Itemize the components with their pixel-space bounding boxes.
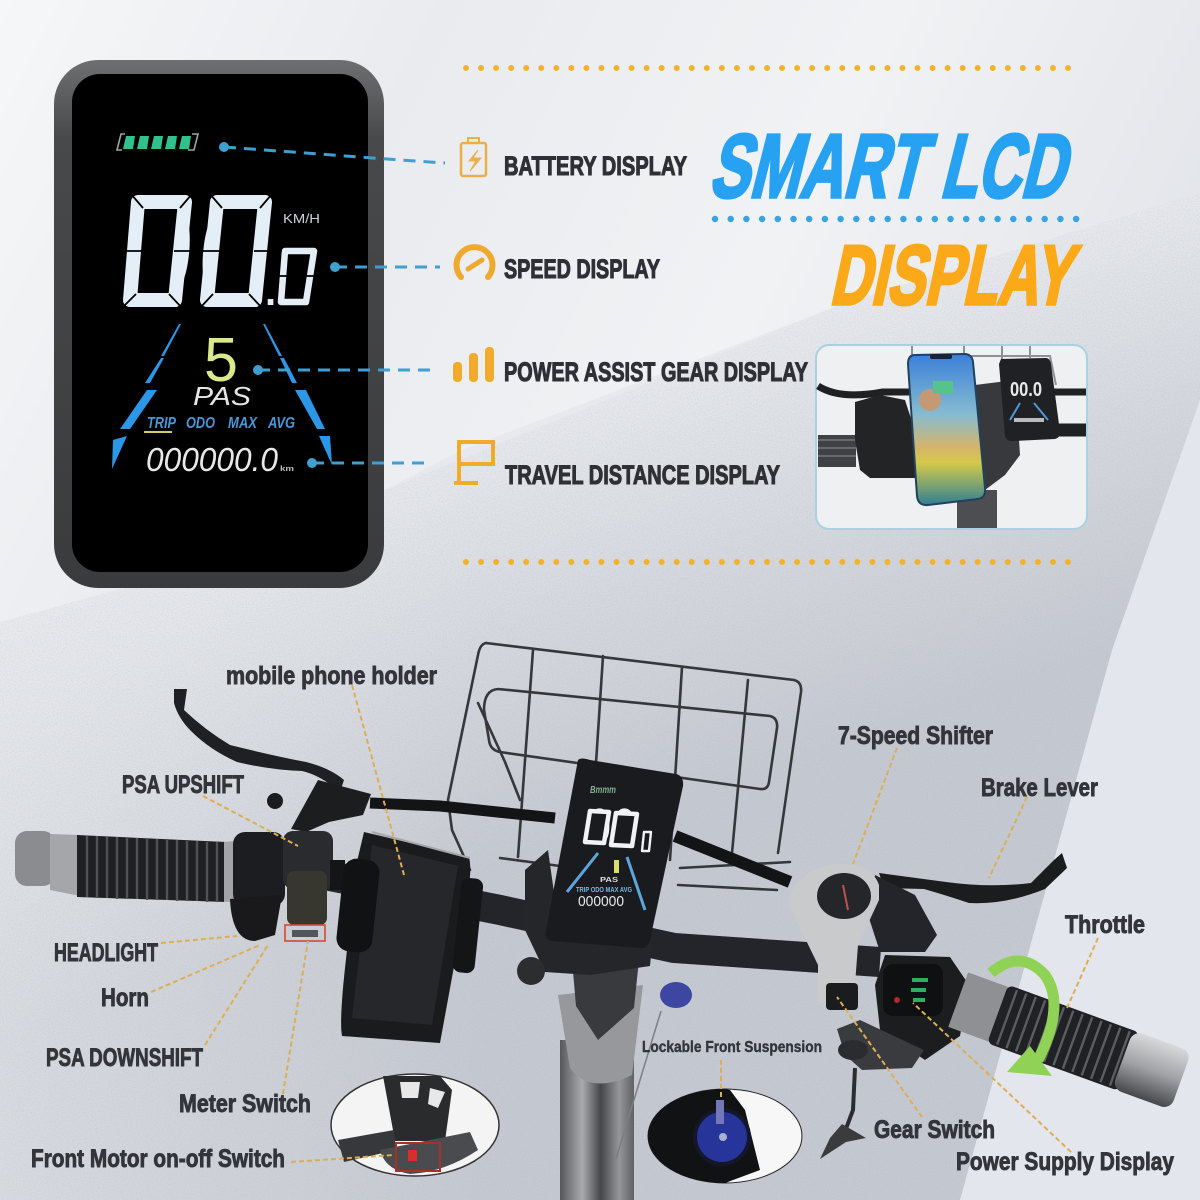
icon: battery xyxy=(461,138,486,176)
suspension lock knob xyxy=(660,982,692,1008)
mode labels: MAX xyxy=(228,415,258,432)
icon: speedometer xyxy=(456,247,492,277)
left brake lever xyxy=(174,689,344,792)
speed reading: 0 xyxy=(278,240,318,317)
label: travel distance display: TRAVEL DISTANCE DISPLAY xyxy=(505,460,780,490)
mode labels: ODO xyxy=(186,415,215,432)
speed road gauge bars xyxy=(112,324,332,469)
small LCD on handlebar: 00 xyxy=(587,800,637,854)
right control pod xyxy=(837,955,969,1070)
LCD display device xyxy=(54,60,384,588)
right grip xyxy=(948,970,1191,1110)
mini display: 00.0 xyxy=(1010,379,1042,401)
small LCD on handlebar: 0 xyxy=(641,832,651,857)
label: power assist gear display: POWER ASSIST GEAR DISPLAY xyxy=(504,357,808,387)
leader lines xyxy=(151,685,1098,1162)
icon: flag xyxy=(454,442,493,483)
odometer: km xyxy=(280,466,294,473)
PAS label: PAS xyxy=(193,381,252,411)
label: speed display: SPEED DISPLAY xyxy=(504,254,660,284)
title line two: DISPLAY xyxy=(825,228,1086,322)
small LCD on handlebar: Bmmm xyxy=(590,785,616,796)
odometer: 000000.0 xyxy=(146,441,279,478)
label: PSA downshift: PSA DOWNSHIFT xyxy=(46,1044,203,1072)
small LCD on handlebar: PAS xyxy=(600,877,618,884)
label: front motor switch: Front Motor on-off Switch xyxy=(31,1145,285,1173)
right brake lever xyxy=(879,853,1067,903)
arrow: throttle rotation xyxy=(991,961,1054,1076)
small LCD on handlebar: TRIP ODO MAX AVG xyxy=(576,887,632,894)
label: throttle: Throttle xyxy=(1065,911,1145,939)
label: 7-speed shifter: 7-Speed Shifter xyxy=(838,722,993,750)
speed reading: . xyxy=(265,270,276,314)
handlebar xyxy=(320,874,880,962)
blue connector lines xyxy=(219,142,445,468)
left controls pod xyxy=(230,780,371,941)
label: gear switch: Gear Switch xyxy=(874,1116,995,1144)
speed reading: 00 xyxy=(122,178,270,332)
label: PSA upshift: PSA UPSHIFT xyxy=(122,771,244,799)
phone xyxy=(908,354,985,505)
mini display xyxy=(999,358,1060,441)
icon: battery indicator xyxy=(117,134,198,150)
small LCD on handlebar xyxy=(517,758,683,985)
blue dotted rule xyxy=(715,216,1080,222)
right cable xyxy=(675,836,790,882)
phone holder xyxy=(335,832,484,1043)
brake body xyxy=(868,875,937,952)
right shifter xyxy=(788,864,879,1011)
left cable xyxy=(370,803,555,818)
label: brake lever: Brake Lever xyxy=(981,774,1098,802)
orange dotted rule top xyxy=(466,65,1083,71)
label: headlight: HEADLIGHT xyxy=(54,939,158,967)
panel: phone and display photo xyxy=(816,345,1087,529)
mode labels: TRIP xyxy=(147,415,176,432)
mode labels xyxy=(144,415,295,433)
label: battery display: BATTERY DISPLAY xyxy=(504,151,687,181)
left grip xyxy=(15,831,245,902)
basket xyxy=(448,643,801,890)
fork xyxy=(558,950,661,1200)
label: meter switch: Meter Switch xyxy=(179,1090,311,1118)
inset: lockable front suspension xyxy=(648,1089,802,1183)
icon: signal bars xyxy=(453,347,494,382)
small LCD on handlebar: 000000 xyxy=(578,893,624,910)
PAS level: 5 xyxy=(204,326,238,395)
label: lockable front suspension: Lockable Front Suspension xyxy=(642,1039,822,1056)
orange dotted rule bottom xyxy=(466,559,1083,565)
label: mobile phone holder: mobile phone holder xyxy=(226,662,437,690)
mode labels: AVG xyxy=(267,415,295,432)
inset: front motor switch xyxy=(331,1074,499,1176)
keys xyxy=(820,1068,866,1159)
label: horn: Horn xyxy=(101,984,149,1012)
speed reading: KM/H xyxy=(283,211,320,226)
